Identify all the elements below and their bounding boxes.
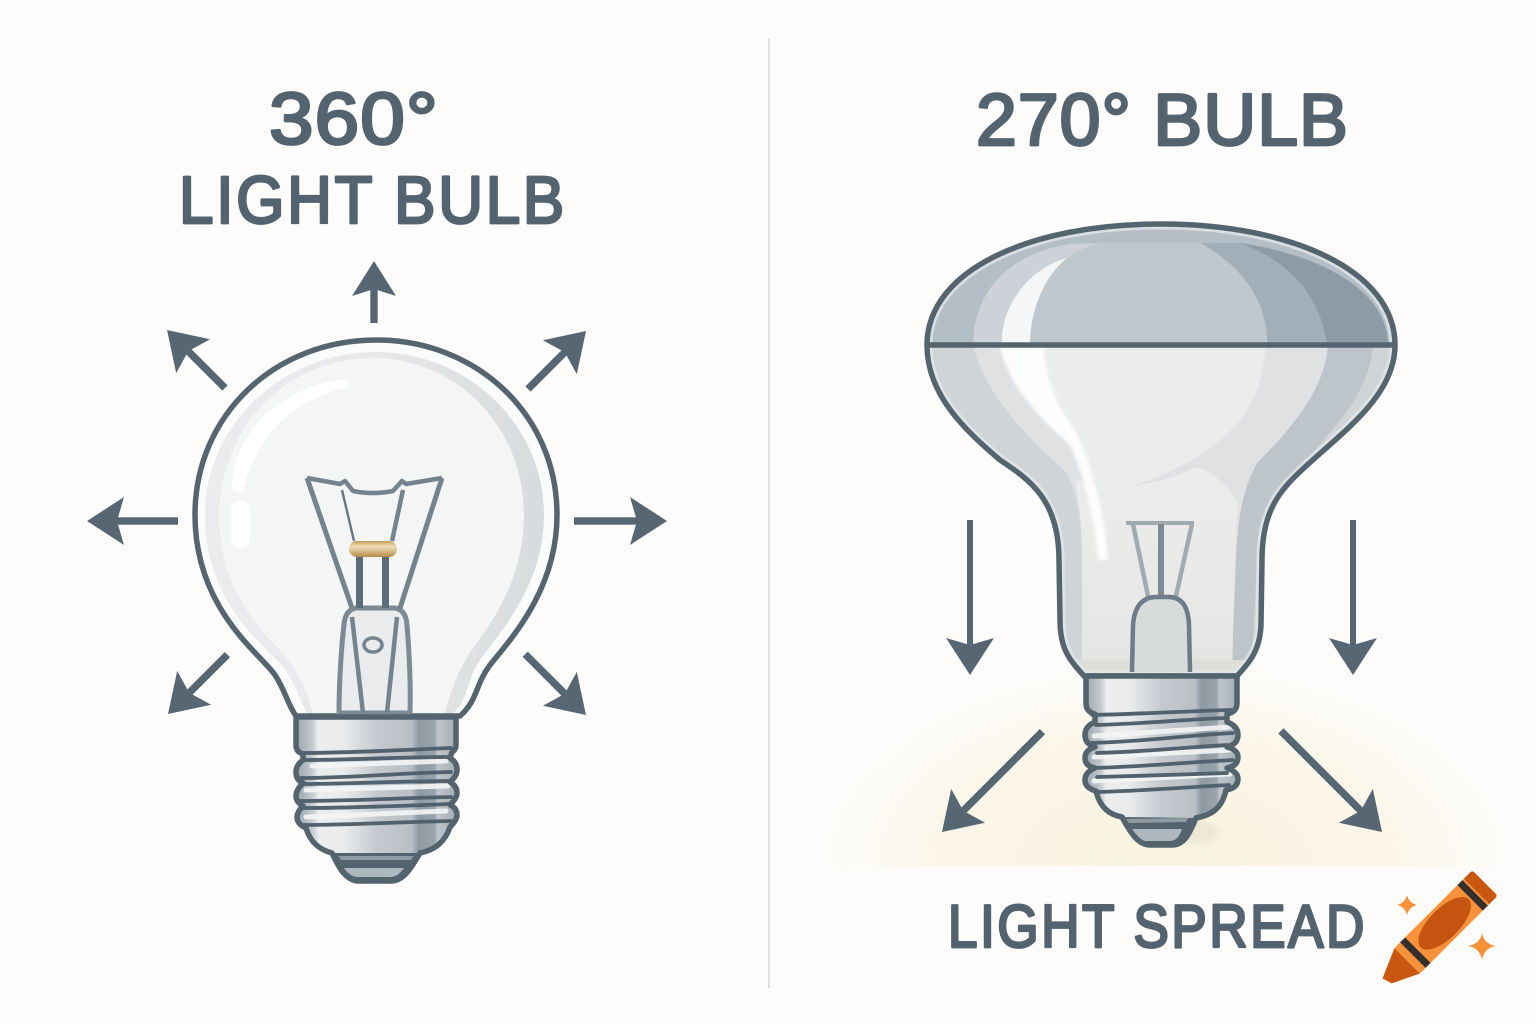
- screw base: [296, 717, 457, 881]
- shadow under base: [1171, 820, 1219, 844]
- bulb glass: [195, 340, 557, 716]
- arrow: diagonal down-left: [925, 715, 1059, 849]
- filament and stem: [307, 478, 442, 713]
- screw base: [1085, 676, 1238, 845]
- icon: 270 degree reflector bulb: [924, 221, 1398, 848]
- arrow: diagonal down-right: [1264, 714, 1399, 849]
- arrow: down-right: [508, 637, 603, 732]
- heading: 360°: 360°: [269, 79, 439, 160]
- icon: 360 degree bulb: [195, 340, 557, 881]
- crayon: [1373, 870, 1498, 995]
- arrow: right: [574, 497, 667, 545]
- arrow: up: [352, 261, 396, 323]
- sparkle small: [1397, 895, 1417, 915]
- light spread glow: [820, 665, 1500, 866]
- panel: 270 degree bulb: [874, 92, 1456, 949]
- divider between the two panels: [768, 39, 770, 988]
- heading: LIGHT BULB: LIGHT BULB: [179, 163, 567, 238]
- arrow: up-right: [511, 314, 603, 406]
- filament and stem: [1126, 523, 1194, 672]
- icon: orange crayon with sparkles: [1373, 870, 1498, 995]
- arrow: down left side: [946, 520, 994, 675]
- sparkle large: [1468, 933, 1496, 960]
- label: LIGHT SPREAD: LIGHT SPREAD: [948, 893, 1367, 960]
- arrow: down right side: [1329, 520, 1377, 675]
- reflector glass: [924, 221, 1398, 679]
- panel: 360 degree light bulb: [87, 79, 667, 881]
- arrow: left: [87, 497, 178, 545]
- arrow: down-left: [151, 638, 244, 731]
- heading: 270° BULB: 270° BULB: [976, 80, 1349, 161]
- arrow: up-left: [150, 313, 242, 405]
